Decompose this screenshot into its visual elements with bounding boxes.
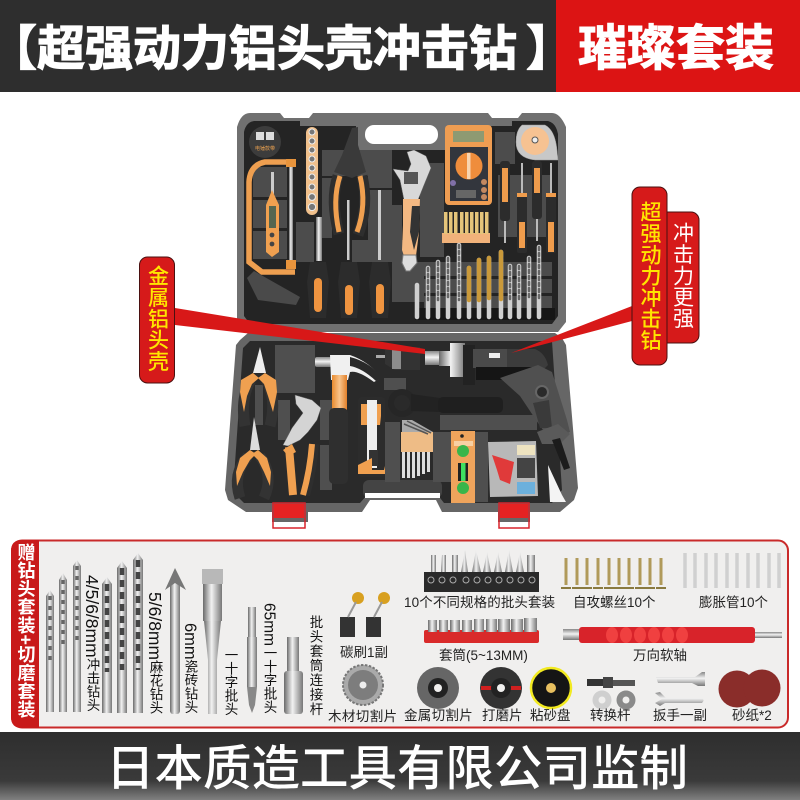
spirit level xyxy=(451,431,475,503)
label: flexible shaft: 万向软轴 xyxy=(633,648,687,663)
label: adapter: 批头套筒连接杆 xyxy=(308,615,323,716)
drill bits in lid xyxy=(417,245,539,317)
utility knife xyxy=(358,397,385,477)
voltage tester xyxy=(266,172,279,257)
accessories panel xyxy=(11,540,788,728)
latch left xyxy=(273,503,305,528)
carbon brushes xyxy=(340,592,390,637)
label: sockets: 套筒(5~13MM) xyxy=(439,647,528,663)
tape measure xyxy=(516,125,558,160)
callout: metal aluminium head: 金属铝头壳 xyxy=(146,265,169,373)
twist drill bits xyxy=(102,553,143,713)
label: metal disc: 金属切割片 xyxy=(404,707,473,723)
latch right xyxy=(499,503,529,528)
socket rail xyxy=(424,618,539,643)
label: wood blade: 木材切割片 xyxy=(328,708,398,724)
hacksaw xyxy=(247,159,300,305)
bit set xyxy=(424,550,539,592)
combination pliers xyxy=(240,347,277,426)
sanding pad xyxy=(531,668,571,708)
adjustable wrench xyxy=(393,150,431,271)
label: wrench pair: 扳手一副 xyxy=(653,708,707,723)
label: carbon brushes: 碳刷1副 xyxy=(340,645,388,660)
grinding disc xyxy=(480,667,522,709)
callout: strong power drill: 超强动力冲击钻 xyxy=(638,201,662,351)
water pump pliers xyxy=(283,395,321,495)
precision screwdrivers xyxy=(500,161,556,253)
self tapping screws xyxy=(561,558,666,588)
flexible shaft xyxy=(563,627,782,643)
label: sanding pad: 粘砂盘 xyxy=(530,707,570,723)
impact drill bits xyxy=(46,560,81,712)
footer band xyxy=(0,732,800,800)
label: cross bit: 一十字批头 xyxy=(222,648,238,716)
wrench pair xyxy=(655,672,705,706)
diamond hole bit xyxy=(202,569,223,714)
header bar xyxy=(0,0,800,92)
wood saw blade xyxy=(343,665,383,705)
label: 65mm bit: 65mm 一十字批头 xyxy=(260,603,278,714)
impact drill xyxy=(376,343,570,470)
side handle xyxy=(391,392,503,414)
footer text: 日本质造工具有限公司监制 xyxy=(106,742,688,796)
sandpaper discs xyxy=(718,670,780,708)
logo badge: 电锤款带 xyxy=(255,145,275,152)
bit holder xyxy=(442,212,490,243)
metal cutting disc xyxy=(417,667,459,709)
multimeter xyxy=(445,125,492,205)
socket adapter xyxy=(284,637,303,714)
callout: strong power drill xyxy=(632,187,667,365)
header badge text: 璀璨套装 xyxy=(578,22,774,76)
callout: impact stronger: 冲击力更强 xyxy=(670,222,694,329)
hammer xyxy=(315,355,382,484)
label: tile bit: 6mm 瓷砖钻头 xyxy=(181,623,199,714)
callout beam left xyxy=(175,308,425,354)
converter rod xyxy=(587,677,636,710)
expansion tubes xyxy=(685,553,779,588)
label: grinding disc: 打磨片 xyxy=(482,707,522,723)
screwdrivers in lid xyxy=(307,190,391,318)
panel tab label: 赠钻头套装+切磨套装 xyxy=(16,542,36,719)
needle nose pliers xyxy=(236,417,271,498)
label: converter rod: 转换杆 xyxy=(590,708,631,723)
socket strip xyxy=(306,127,318,215)
label: sandpaper: 砂纸*2 xyxy=(732,708,772,723)
toolbox upper lid xyxy=(237,113,566,332)
callout: metal aluminium head xyxy=(140,257,174,383)
tile drill bit xyxy=(165,568,186,714)
label: screws: 自攻螺丝10个 xyxy=(573,595,656,610)
callout: impact stronger xyxy=(650,212,699,343)
label: bit set: 10个不同规格的批头套装 xyxy=(404,595,555,610)
title: 【超强动力铝头壳冲击钻】 xyxy=(0,23,574,76)
callout beam right xyxy=(511,306,632,353)
label: tubes: 膨胀管10个 xyxy=(699,595,769,610)
label: impact bits: 4/5/6/8mm 冲击钻头 xyxy=(82,575,102,712)
label: twist bits: 5/6/8mm 麻花钻头 xyxy=(145,592,165,714)
logo badge xyxy=(249,126,281,158)
hex key set xyxy=(401,420,433,478)
double ended bit xyxy=(247,607,257,713)
anchor and screw bag xyxy=(488,441,538,497)
toolbox lower case xyxy=(225,333,578,528)
wire strippers xyxy=(334,127,366,235)
